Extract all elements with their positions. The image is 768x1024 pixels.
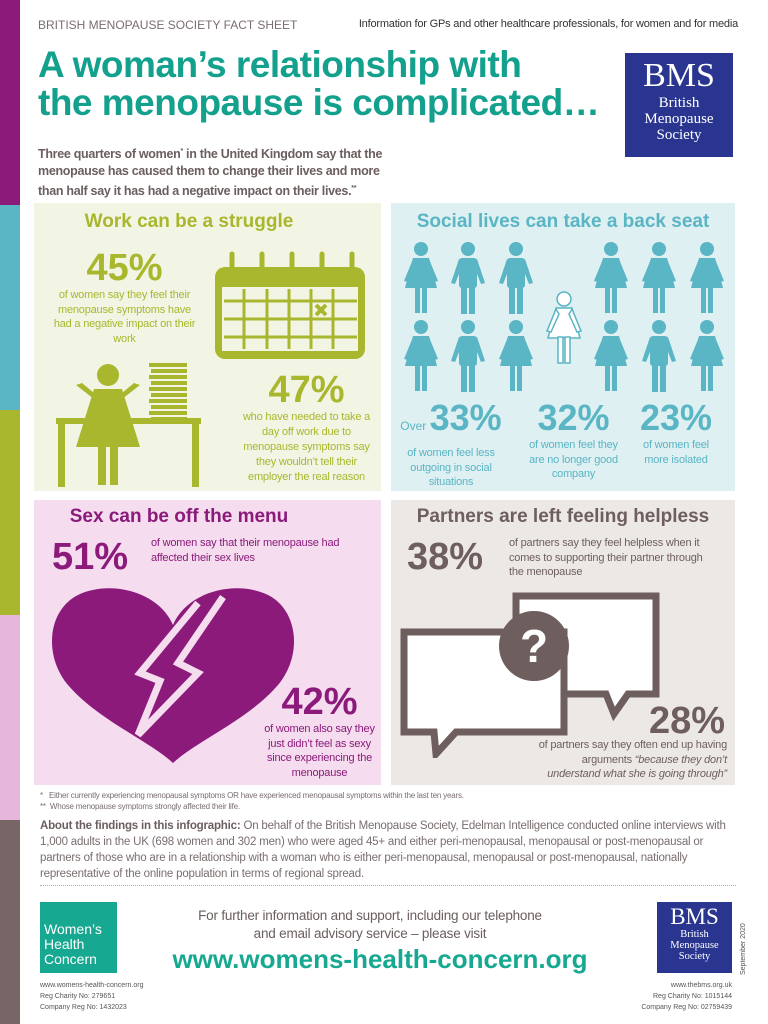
intro text: Three quarters of women* in the United Kingdom say that the xyxy=(38,147,382,161)
WHC details: Reg Charity No: 279651 xyxy=(40,993,115,1000)
footer call to action: For further information and support, including our telephone xyxy=(198,908,542,923)
stat 42% xyxy=(264,681,375,778)
icon: calendar xyxy=(215,252,365,359)
date: September 2020 xyxy=(740,923,747,975)
icon: broken heart xyxy=(52,588,294,763)
logo: BMS footer xyxy=(657,902,732,973)
logo: BMS: Society xyxy=(656,127,702,143)
BMS details xyxy=(641,982,732,1011)
footer call to action xyxy=(198,908,542,941)
title xyxy=(38,44,599,123)
icon: people xyxy=(404,242,724,392)
logo: BMS footer: Society xyxy=(679,951,710,962)
footnotes: ** Whose menopause symptoms strongly affected their life. xyxy=(40,802,240,811)
intro text xyxy=(38,147,382,198)
header: BRITISH MENOPAUSE SOCIETY FACT SHEET xyxy=(38,18,297,32)
heading: partners: Partners are left feeling helpless xyxy=(417,506,709,527)
WHC details: Company Reg No: 1432023 xyxy=(40,1004,127,1011)
logo: Women's Health Concern xyxy=(40,902,117,973)
logo: BMS: Menopause xyxy=(644,111,714,127)
stat 45%: 45% xyxy=(86,247,163,289)
stat 47%: who have needed to take a day off work due to menopause symptoms say they wouldn’t tell their employer the real reason xyxy=(243,411,370,483)
BMS details: www.thebms.org.uk xyxy=(671,982,732,989)
stat 32% xyxy=(529,397,618,480)
logo: Women's Health Concern: Women’s xyxy=(44,921,102,937)
text 38%: of partners say they feel helpless when it comes to supporting their partner through the menopause xyxy=(509,537,703,578)
footnotes xyxy=(40,791,464,811)
heading: social: Social lives can take a back seat xyxy=(417,211,709,232)
stat 47%: 47% xyxy=(268,369,345,411)
header: Information for GPs and other healthcare professionals, for women and for media xyxy=(359,18,738,30)
stat 23%: 23% xyxy=(640,397,712,438)
stat 33%: Over 33% xyxy=(400,397,502,438)
stat 45% xyxy=(54,247,196,344)
title: A woman’s relationship with xyxy=(38,44,521,85)
logo: Women's Health Concern: Concern xyxy=(44,951,97,967)
footnotes: * Either currently experiencing menopausal symptoms OR have experienced menopausal symptoms within the last ten years. xyxy=(40,791,464,800)
icon: speech bubbles xyxy=(400,592,660,758)
stat 42%: of women also say they just didn’t feel as sexy since experiencing the menopause xyxy=(264,723,375,778)
logo: BMS footer: Menopause xyxy=(670,940,719,951)
logo: BMS xyxy=(625,53,733,157)
stat 32%: 32% xyxy=(537,397,610,438)
stat 47% xyxy=(243,369,370,483)
footer url: www.womens-health-concern.org xyxy=(172,944,588,974)
stat 38%: 38% xyxy=(407,536,483,578)
about text: About the findings in this infographic: On behalf of the British Menopause Society, Edelman Intelligence conducted online interviews with 1,000 adults in the UK (698 women and 302 men) who were aged 45+ and either peri-menopausal, menopausal or post-menopausal or partners of those who are in a relationship with a woman who is either peri-menopausal, menopausal or post-menopausal, nationally representative of the online population in terms of regional spread. xyxy=(40,820,726,880)
intro text: menopause has caused them to change their lives and more xyxy=(38,164,380,178)
stat 42%: 42% xyxy=(281,681,358,723)
text 28%: of partners say they often end up having arguments “because they don’t understand what she is going through” xyxy=(539,739,727,780)
panel: partners xyxy=(391,500,735,785)
icon: speech bubbles: ? xyxy=(520,620,548,672)
BMS details: Reg Charity No: 1015144 xyxy=(653,993,732,1000)
panel: social xyxy=(391,203,735,491)
WHC details: www.womens-health-concern.org xyxy=(40,982,144,989)
logo: BMS footer: British xyxy=(680,929,709,940)
BMS details: Company Reg No: 02759439 xyxy=(641,1004,732,1011)
WHC details xyxy=(40,982,144,1011)
stat 51%: 51% xyxy=(52,536,128,578)
sidebar colour strip xyxy=(0,0,20,1024)
icon: woman at desk xyxy=(56,363,201,487)
stat 45%: of women say they feel their menopause symptoms have had a negative impact on their work xyxy=(54,289,195,344)
stat 32%: of women feel they are no longer good company xyxy=(529,439,618,480)
panel: work xyxy=(34,203,381,491)
stat 33% xyxy=(400,397,502,488)
logo: BMS footer: BMS xyxy=(670,904,719,929)
title: the menopause is complicated… xyxy=(38,82,599,123)
stat 33%: of women feel less outgoing in social situations xyxy=(407,447,495,488)
footer call to action: and email advisory service – please visit xyxy=(254,926,486,941)
heading: sex: Sex can be off the menu xyxy=(70,506,288,527)
stat 23%: of women feel more isolated xyxy=(643,439,709,466)
text 51%: of women say that their menopause had affected their sex lives xyxy=(151,537,339,564)
panel: sex xyxy=(34,500,381,785)
logo: Women's Health Concern: Health xyxy=(44,936,84,952)
stat 23% xyxy=(640,397,712,466)
header xyxy=(38,18,738,32)
stat 28%: 28% xyxy=(649,700,725,742)
intro text: than half say it has had a negative impact on their lives.** xyxy=(38,184,356,198)
logo: BMS: BMS xyxy=(643,57,715,94)
heading: work: Work can be a struggle xyxy=(85,211,293,232)
logo: BMS: British xyxy=(659,95,699,111)
